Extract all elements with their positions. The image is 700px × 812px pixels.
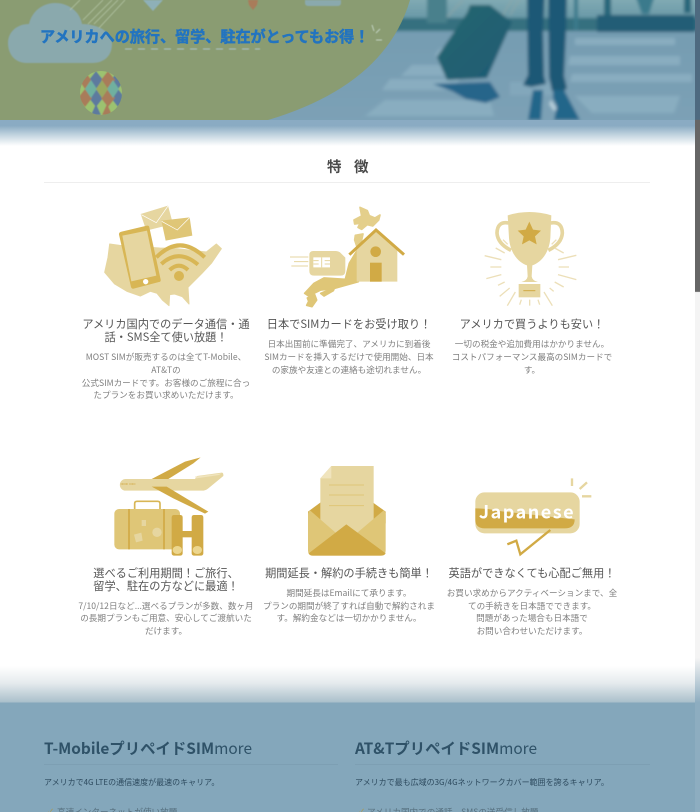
- feature: cheaper than buying in USA: [452, 212, 612, 376]
- feature: cheaper than buying in USA: コストパフォーマンス最高のSIMカードで: [452, 351, 612, 363]
- description: MOST SIMが販売するのは全てT-Mobile、: [86, 351, 246, 363]
- feature: data, calls and SMS: AT&Tの: [151, 364, 181, 376]
- feature: easy extension and cancellation: [263, 466, 435, 624]
- feature: cheaper than buying in USA: す。: [524, 364, 540, 376]
- description: 期間延長はEmailにて承ります。: [287, 587, 411, 599]
- feature: selectable usage period: の長期プランもご用意、安心してご渡航いた: [80, 612, 252, 624]
- icon: plane, suitcase and binoculars: [114, 458, 224, 556]
- feature: Japanese support: お問い合わせいただけます。: [477, 625, 587, 637]
- banner headline: アメリカへの旅行、留学、駐在がとってもお得！: [40, 25, 369, 47]
- heading: T-MobileプリペイドSIMmore: [44, 737, 252, 759]
- description: アメリカで最も広域の3G/4Gネットワークカバー範囲を誇るキャリア。: [355, 777, 609, 788]
- scrollbar: [695, 0, 700, 812]
- description: 7/10/12日など...選べるプランが多数、数ヶ月: [78, 600, 254, 612]
- icon: Japanese speech bubble: [475, 478, 592, 556]
- banner: airport photo with green circle: [0, 0, 695, 120]
- icon: Japanese speech bubble: Japanese: [479, 499, 575, 525]
- feature: data, calls and SMS: たプランをお買い求めいただけます。: [93, 389, 239, 401]
- feature: Japanese support: [447, 478, 617, 637]
- feature: Japanese support: 問題があった場合も日本語で: [476, 612, 588, 624]
- feature: selectable usage period: 留学、駐在の方などに最適！: [93, 578, 239, 594]
- icon: trophy: [484, 212, 576, 306]
- icon: envelope with letter: [308, 466, 386, 556]
- icon: USA map with phone and wifi: [104, 206, 222, 306]
- feature: selectable usage period: だけます。: [145, 625, 187, 637]
- feature: receive SIM in Japan: SIMカードを挿入するだけで使用開始、日本: [264, 351, 434, 363]
- section heading: 特徴: [327, 156, 381, 177]
- T-Mobile plan: [44, 737, 252, 812]
- description: アメリカで4G LTEの通信速度が最速のキャリア。: [44, 777, 219, 788]
- feature: easy extension and cancellation: プランの期間が終了すれば自動で解約されま: [263, 600, 435, 612]
- feature: Japanese support: ての手続きを日本語でできます。: [468, 600, 596, 612]
- description: 一切の税金や追加費用はかかりません。: [455, 338, 609, 350]
- feature: selectable usage period: [78, 458, 254, 637]
- title: 日本でSIMカードをお受け取り！: [267, 316, 431, 332]
- description: お買い求めからアクティベーションまで、全: [447, 587, 617, 599]
- icon: hot air balloon: [80, 71, 122, 115]
- title: アメリカ国内でのデータ通信・通: [82, 316, 250, 332]
- green circle area: [0, 0, 410, 120]
- gradient band under banner: [0, 120, 700, 146]
- description: 日本出国前に準備完了、アメリカに到着後: [268, 338, 430, 350]
- title: 選べるご利用期間！ご旅行、: [93, 565, 239, 581]
- feature: data, calls and SMS: 話・SMS全て使い放題！: [104, 329, 228, 345]
- heading: AT&TプリペイドSIMmore: [355, 737, 537, 759]
- feature: easy extension and cancellation: す。解約金などは一切かかりません。: [276, 612, 421, 624]
- title: アメリカで買うよりも安い！: [460, 316, 604, 332]
- icon: Japan map, SIM card and house: [290, 206, 405, 308]
- clouds and decoration: [8, 0, 382, 63]
- footer: carrier plans panel: [0, 660, 700, 812]
- title: 英語ができなくても心配ご無用！: [449, 565, 615, 581]
- feature: receive SIM in Japan: [264, 206, 434, 376]
- AT&T plan: [355, 737, 609, 812]
- feature: receive SIM in Japan: の家族や友達との連絡も途切れません。: [272, 364, 426, 376]
- title: 期間延長・解約の手続きも簡単！: [265, 565, 433, 581]
- feature: data, calls and SMS: 公式SIMカードです。お客様のご旅程に合っ: [82, 376, 250, 388]
- feature: data, calls and SMS: [82, 206, 250, 401]
